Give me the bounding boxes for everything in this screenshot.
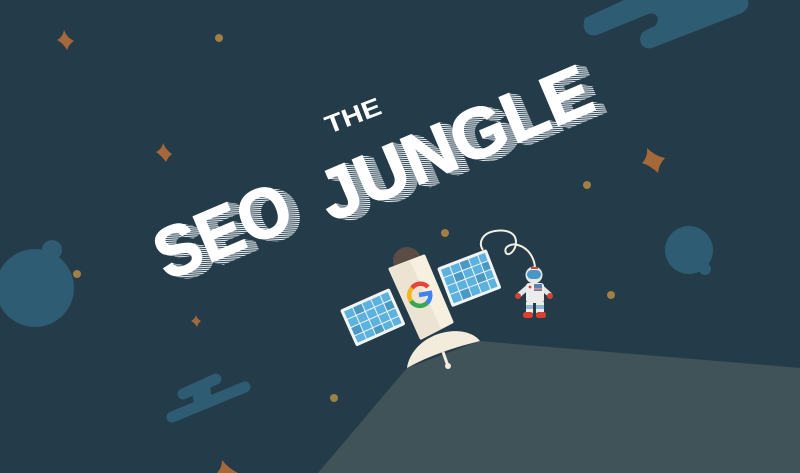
solar panel left — [340, 288, 406, 347]
title: JUNGLE shadow: JUNGLE — [310, 51, 608, 238]
title: JUNGLE shadow: JUNGLE — [308, 51, 606, 237]
title: JUNGLE shadow: JUNGLE — [315, 52, 613, 239]
title: SEO shadow: SEO — [146, 168, 308, 297]
google logo — [409, 284, 430, 306]
title: JUNGLE shadow: JUNGLE — [317, 53, 615, 239]
title: SEO shadow: SEO — [143, 168, 305, 296]
dish stem — [443, 352, 451, 369]
title: JUNGLE shadow: JUNGLE — [313, 52, 611, 238]
title: SEO: SEO — [142, 168, 304, 296]
title: JUNGLE shadow: JUNGLE — [316, 53, 614, 239]
title: JUNGLE: JUNGLE — [306, 51, 604, 237]
dome — [393, 247, 421, 275]
title: SEO shadow: SEO — [147, 169, 309, 297]
stars — [57, 30, 665, 473]
title: SEO shadow: SEO — [151, 169, 313, 298]
body — [389, 256, 452, 339]
title: SEO shadow: SEO — [144, 168, 306, 296]
planet right — [665, 226, 713, 275]
title: JUNGLE shadow: JUNGLE — [312, 52, 610, 238]
astronaut — [515, 266, 553, 318]
dots — [73, 34, 615, 402]
title: SEO shadow: SEO — [150, 169, 312, 297]
satellite — [340, 230, 535, 369]
tether — [481, 230, 535, 267]
title: SEO shadow: SEO — [148, 169, 310, 297]
title: SEO shadow: SEO — [152, 170, 314, 298]
ground — [318, 341, 800, 473]
cloud top right — [584, 0, 748, 48]
title: SEO shadow: SEO — [149, 169, 311, 297]
dish — [407, 331, 480, 368]
title: JUNGLE shadow: JUNGLE — [311, 52, 609, 238]
planet left — [0, 240, 74, 327]
title: JUNGLE shadow: JUNGLE — [309, 51, 607, 237]
cloud bottom left — [172, 379, 245, 417]
title: THE: THE — [321, 93, 385, 140]
title: JUNGLE shadow: JUNGLE — [307, 51, 605, 237]
title — [142, 48, 615, 301]
title: JUNGLE shadow: JUNGLE — [314, 52, 612, 238]
solar panel right — [437, 249, 502, 307]
title: SEO shadow: SEO — [145, 168, 307, 296]
title: SEO shadow: SEO — [153, 170, 315, 298]
